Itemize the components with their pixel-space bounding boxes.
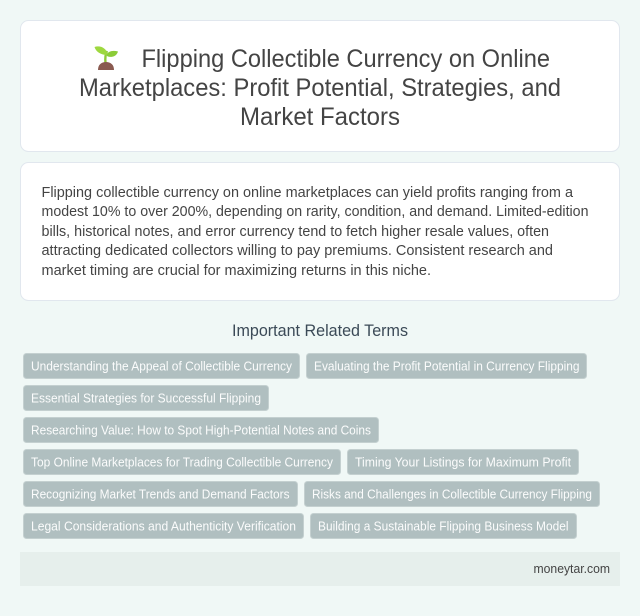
chip: timing: Timing Your Listings for Maximum Profit [355,454,571,470]
summary text [42,184,588,279]
chip: marketplaces [24,450,340,474]
panel: title card [20,20,620,152]
title [79,45,561,131]
chip: business model: Building a Sustainable Flipping Business Model [318,518,569,534]
chip: legal [24,514,304,538]
heading: related terms: Important Related Terms [232,322,408,340]
chip: business model [310,514,576,538]
chip: timing [348,450,578,474]
title: Marketplaces: Profit Potential, Strategies, and [79,74,561,102]
chip: risks: Risks and Challenges in Collectible Currency Flipping [312,486,592,502]
chip: trends: Recognizing Market Trends and Demand Factors [31,486,290,502]
related terms chips [24,354,600,538]
summary text: Flipping collectible currency on online marketplaces can yield profits ranging from a [42,184,574,201]
icon: sprout [94,46,118,70]
footer source: moneytar.com [534,561,610,576]
summary text: market timing are crucial for maximizing returns in this niche. [42,262,431,279]
panel: summary card [20,162,620,300]
title: Flipping Collectible Currency on Online [142,45,550,73]
chip: strategies [24,386,268,410]
chip: risks [304,482,600,506]
chip: profit potential: Evaluating the Profit Potential in Currency Flipping [314,358,580,374]
chip: researching value: Researching Value: How to Spot High-Potential Notes and Coins [31,422,371,438]
summary text: bills, historical notes, and error currency tend to fetch higher resale values, often [42,223,549,240]
chip: appeal: Understanding the Appeal of Collectible Currency [31,358,292,374]
summary text: attracting dedicated collectors willing to pay premiums. Consistent research and [42,242,553,259]
chip: appeal [24,354,300,378]
title: Market Factors [240,103,400,131]
chip: strategies: Essential Strategies for Successful Flipping [31,390,261,406]
chip: researching value [24,418,378,442]
chip: marketplaces: Top Online Marketplaces for Trading Collectible Currency [31,454,333,470]
chip: trends [24,482,298,506]
chip: legal: Legal Considerations and Authenticity Verification [31,518,296,534]
summary text: modest 10% to over 200%, depending on rarity, condition, and demand. Limited-edition [42,203,588,220]
chip: profit potential [306,354,586,378]
footer bar [20,552,620,586]
